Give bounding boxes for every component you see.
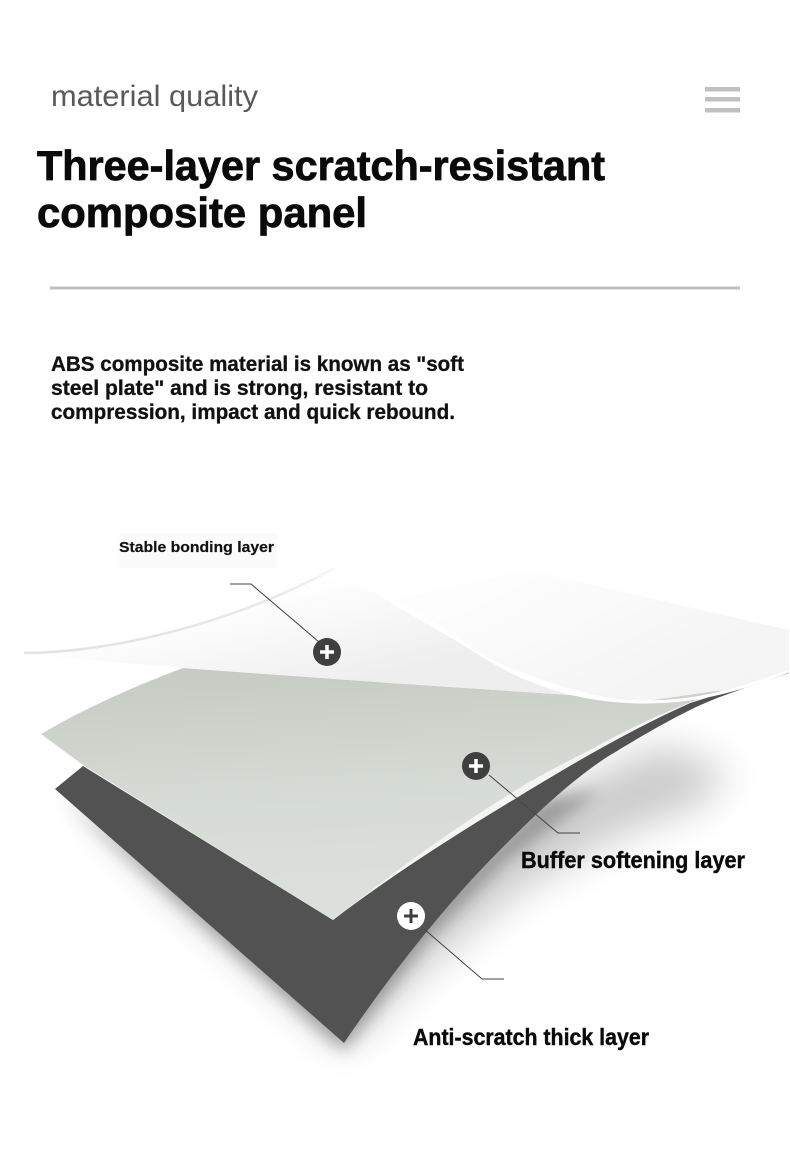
icon: menu bars [705, 87, 740, 112]
sheet top edge highlight [24, 568, 335, 653]
callout: buffer softening layer [462, 752, 745, 873]
title: composite panel [37, 189, 367, 236]
description text [51, 353, 464, 424]
top bonding sheet [24, 568, 570, 695]
title: Three-layer scratch-resistant [37, 142, 605, 189]
callout: anti-scratch thick layer [397, 902, 649, 1050]
shadow under panel [58, 745, 730, 1052]
white strip of the middle layer [333, 669, 789, 920]
section label: material quality [51, 80, 258, 113]
layered panel illustration [24, 568, 789, 1052]
callout: stable bonding layer: Stable bonding layer [119, 539, 274, 556]
callout: buffer softening layer: Buffer softening layer [521, 847, 745, 873]
description text: steel plate" and is strong, resistant to [51, 377, 428, 400]
title [37, 142, 605, 236]
dark anti-scratch layer [55, 672, 789, 1043]
callout: anti-scratch thick layer: Anti-scratch thick layer [413, 1024, 649, 1050]
description text: ABS composite material is known as "soft [51, 353, 464, 376]
back sheet [392, 570, 789, 702]
green buffer layer [41, 668, 723, 920]
callout: stable bonding layer [119, 533, 341, 666]
description text: compression, impact and quick rebound. [51, 401, 455, 424]
sheet fold highlight [392, 603, 789, 702]
divider [50, 286, 740, 290]
